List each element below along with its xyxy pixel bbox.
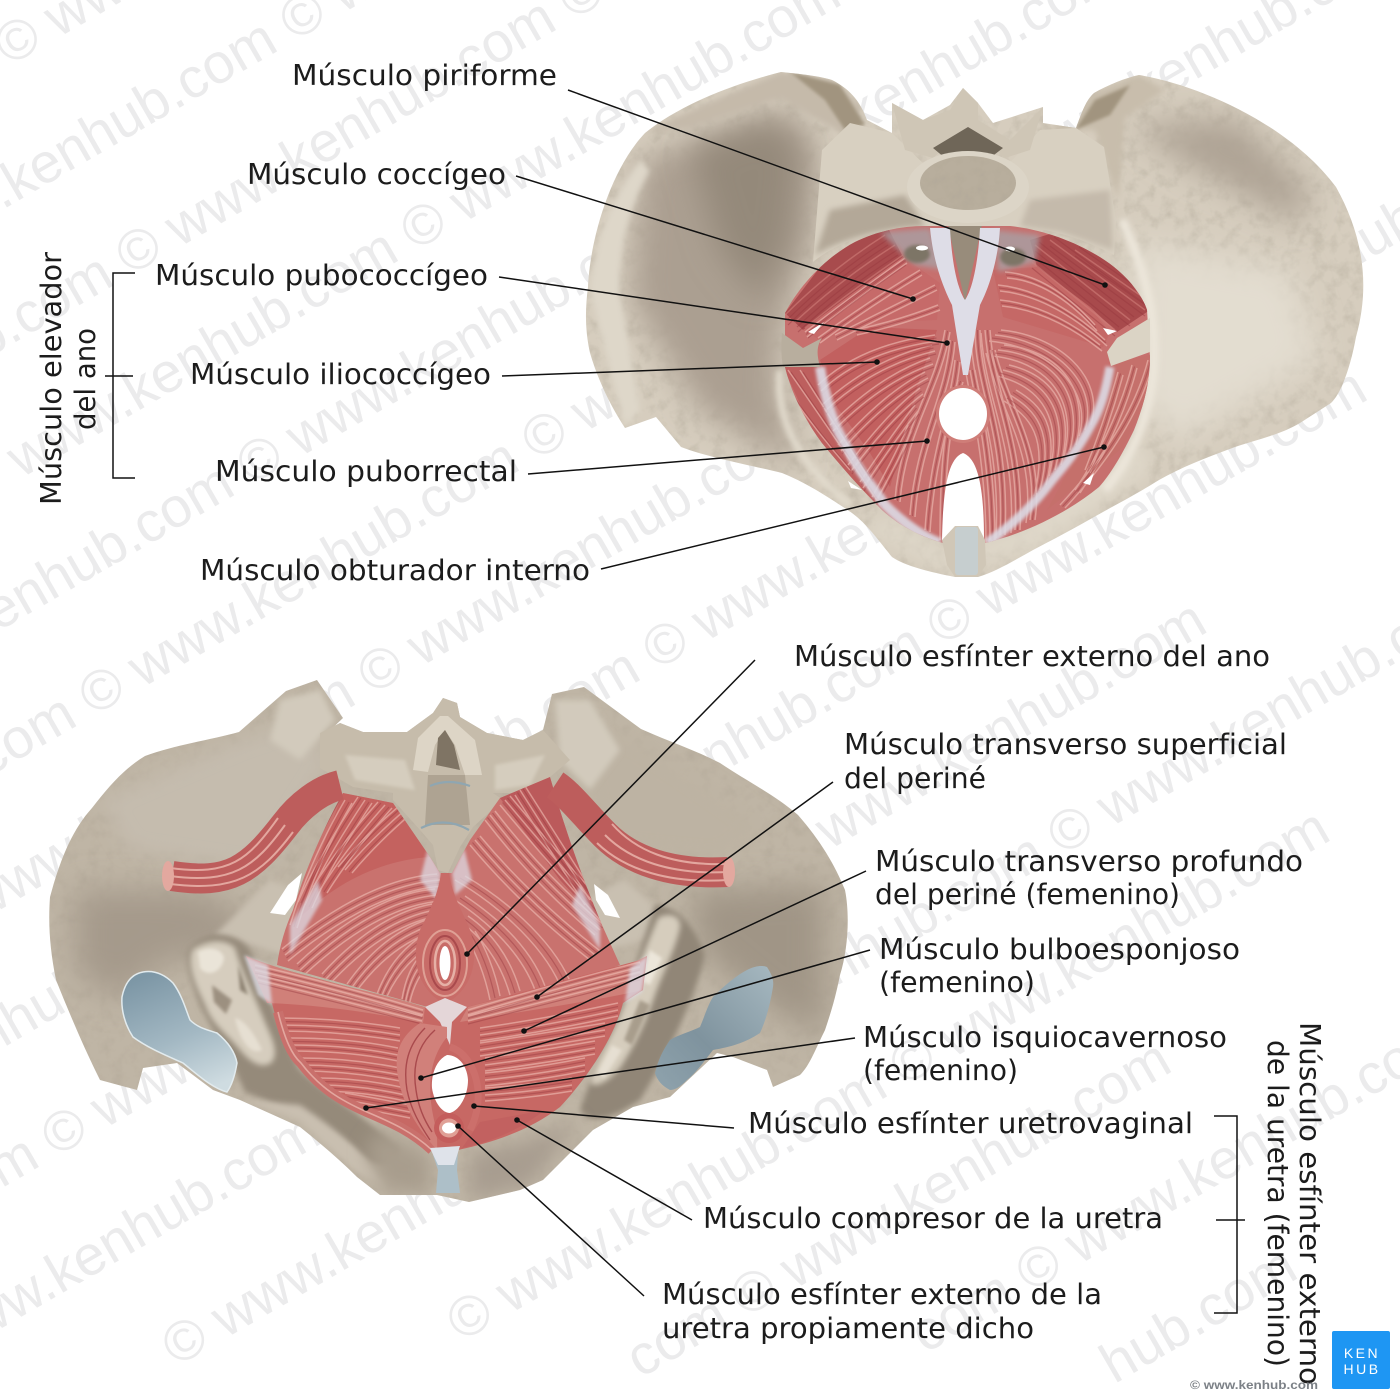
left pubic shading [365, 1130, 430, 1195]
bracket: levator ani [105, 273, 135, 478]
dark diaphragm fibres [284, 788, 608, 1008]
left ramus rough bone shadow [187, 935, 400, 1164]
left acetabulum cartilage [122, 972, 237, 1092]
white anococcygeal tendon [930, 228, 1000, 375]
labels: upper view: Músculo piriforme [292, 59, 557, 92]
obturator foramina [270, 873, 620, 918]
copyright: © www.kenhub.com [1190, 1380, 1318, 1392]
sacral foramina shadows [904, 245, 1026, 266]
sacrum shading right [1020, 190, 1113, 250]
pubic symphysis [430, 1146, 460, 1193]
pelvic bone silhouette [570, 60, 1380, 590]
label: levator ani group: Músculo elevador [35, 252, 68, 505]
perineal body fascia [425, 998, 467, 1045]
pubic symphysis [942, 526, 986, 577]
right pubic shading [468, 1126, 568, 1201]
right piriformis [1030, 230, 1150, 332]
labels: upper view: Músculo obturador interno [200, 554, 590, 587]
fascia right edge [572, 885, 600, 950]
bone notch left [781, 333, 822, 367]
labels: upper view: Músculo coccígeo [247, 158, 506, 191]
labels: lower view: del periné (femenino) [875, 878, 1180, 911]
fascia at lateral edges [290, 880, 322, 955]
dark fibres [787, 237, 1151, 541]
left obturator strip [783, 367, 880, 507]
superficial transverse perineal muscle right [460, 956, 647, 1024]
sacrum wings [813, 123, 1116, 262]
levator hiatus openings [936, 385, 990, 540]
compressor urethrae [462, 1110, 545, 1148]
right coccygeus [1004, 267, 1100, 346]
labels: upper view: Músculo iliococcígeo [190, 358, 491, 391]
watermark: © www.kenhub.com © www.kenhub.com [435, 795, 1339, 1353]
vertebral body [907, 151, 1029, 223]
right acetabulum cartilage [655, 966, 773, 1090]
labels: lower view: Músculo isquiocavernoso [863, 1021, 1227, 1054]
urethral sphincter [434, 1113, 464, 1143]
grey fascia upper right [995, 230, 1040, 272]
label: levator ani group [35, 252, 102, 505]
labels: lower view: Músculo esfínter externo de la [662, 1278, 1102, 1311]
bulbospongiosus right [450, 1047, 478, 1130]
pelvic bone silhouette [40, 670, 860, 1210]
fascial arcus left [820, 367, 940, 543]
pelvic floor muscles [785, 226, 1150, 543]
vertebral canal and spinous process [892, 88, 1043, 158]
labels: lower view: Músculo bulboesponjoso [879, 933, 1240, 966]
left ramus light ridge [190, 941, 275, 1065]
labels: lower view: Músculo compresor de la uretra [703, 1202, 1163, 1235]
labels: upper view: Músculo puborrectal [215, 455, 517, 488]
grey fascia upper [880, 228, 945, 270]
labels: lower view: Músculo esfínter uretrovaginal [748, 1107, 1193, 1140]
bulbospongiosus left [397, 1023, 447, 1150]
labels: upper view [155, 59, 590, 587]
fibres [784, 235, 1153, 543]
dark membrane fibres [280, 1006, 618, 1115]
labels: lower view: del periné [844, 762, 986, 795]
coccygeus shading [298, 793, 430, 912]
leader line end dots [363, 282, 1108, 1129]
right obturator strip [1142, 355, 1150, 408]
sacrum visible centre [948, 225, 982, 302]
fascia ends of transverse muscle right [625, 955, 648, 1003]
fascial arcus right [987, 367, 1110, 543]
labels: lower view: (femenino) [863, 1054, 1018, 1087]
left ramus mottling [198, 949, 262, 1051]
labels: lower view: Músculo transverso superficial [844, 728, 1287, 761]
external anal sphincter [416, 873, 474, 1004]
perineal membrane and deep transverse muscle [272, 961, 643, 1150]
left piriformis [785, 226, 903, 330]
label: external urethral sphincter group: de la uretra (femenino) [1261, 1040, 1294, 1367]
label: external urethral sphincter group [1261, 1022, 1326, 1385]
logo: Kenhub: KEN [1344, 1345, 1380, 1361]
superficial transverse perineal muscle left [246, 956, 425, 1024]
watermark: com © www.kenhub.com [615, 1026, 1180, 1389]
labels: lower view: Músculo transverso profundo [875, 845, 1303, 878]
sacrum and coccyx [320, 698, 570, 873]
pelvic diaphragm muscles [277, 777, 620, 1007]
sacrum shading [815, 195, 925, 255]
sciatic foramina small holes [808, 246, 1117, 490]
watermark: hub.com [1089, 1233, 1306, 1395]
bracket: external urethral sphincter [1214, 1116, 1245, 1313]
piriformis left [162, 785, 340, 891]
ischiocavernosus muscle [278, 1012, 432, 1150]
leader lines [366, 90, 1105, 1296]
piriformis right [555, 785, 735, 887]
labels: lower view: uretra propiamente dicho [662, 1312, 1034, 1345]
left iliococcygeus [820, 327, 937, 487]
right coccygeus shading [500, 777, 602, 925]
left lower ramus light band [260, 1100, 370, 1174]
illustration: inferior view of female pelvis [40, 670, 860, 1210]
bone notch right [1107, 318, 1150, 366]
left coccygeus [803, 257, 940, 340]
label: external urethral sphincter group: Músculo esfínter externo [1293, 1022, 1326, 1385]
logo: Kenhub: HUB [1343, 1361, 1381, 1377]
right ramus mottling [598, 950, 662, 1078]
right ramus light ridge [590, 915, 680, 1085]
labels: lower view [662, 640, 1303, 1345]
right ramus rough bone shadow [580, 905, 705, 1119]
labels: upper view: Músculo pubococcígeo [155, 259, 488, 292]
logo: Kenhub [1332, 1331, 1390, 1389]
labels: lower view: (femenino) [879, 966, 1035, 999]
label: levator ani group: del ano [69, 328, 102, 430]
illustration: superior view of female pelvis [570, 60, 1380, 590]
labels: lower view: Músculo esfínter externo del ano [794, 640, 1270, 673]
fascia around coccyx [420, 848, 472, 900]
fascia ends of transverse muscle left [244, 955, 272, 1005]
vaginal opening [432, 1055, 468, 1113]
